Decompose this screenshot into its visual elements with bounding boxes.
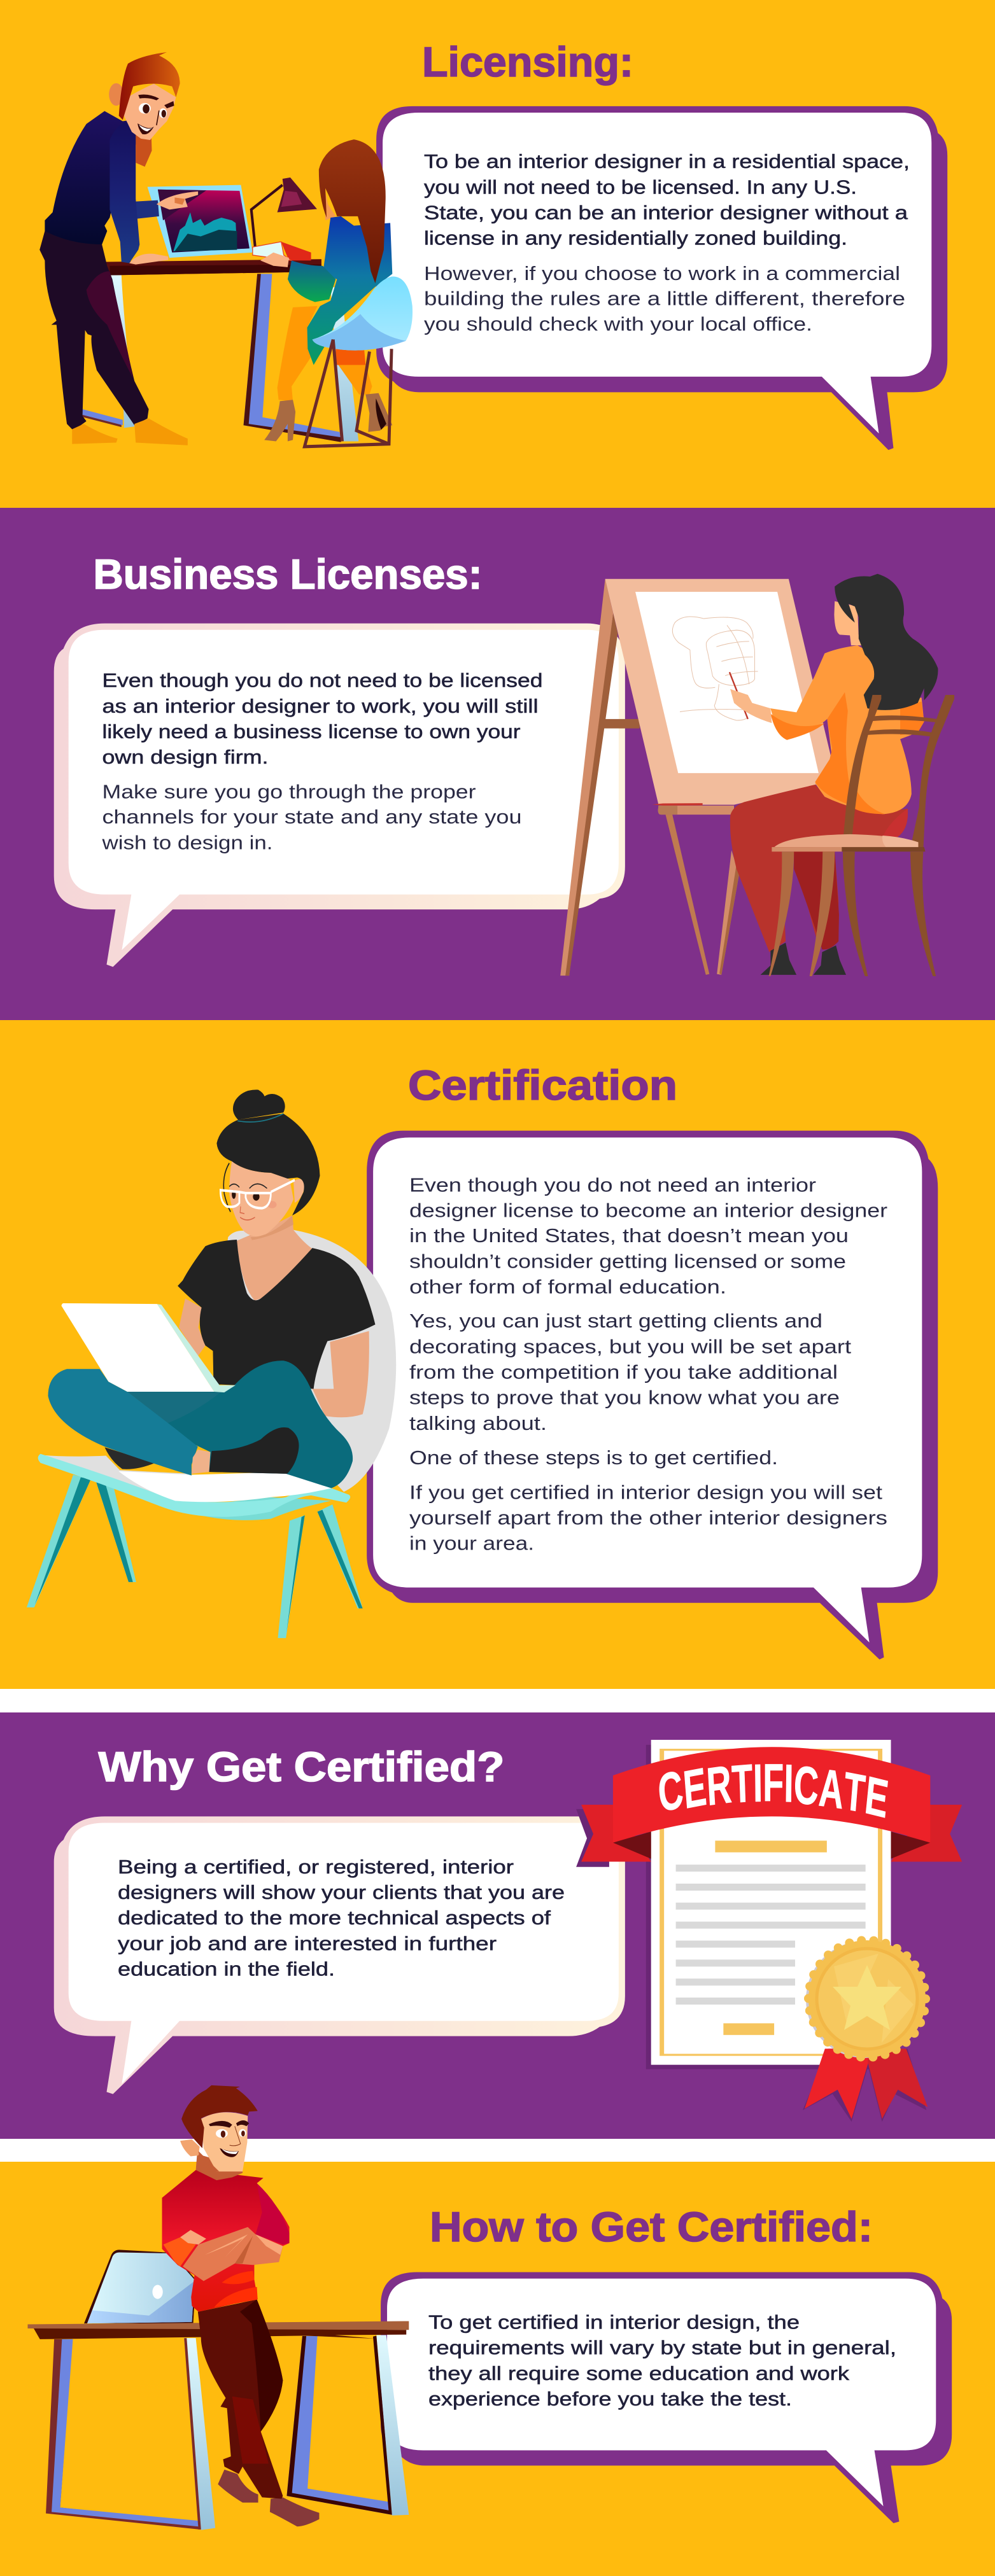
gold seal: [806, 1940, 926, 2058]
laptop: [84, 2250, 196, 2323]
text block: certification: Even though you do not need an interior: [409, 1173, 816, 1196]
woman: [178, 1089, 375, 1417]
text block: how to get certified: experience before you take the test.: [428, 2388, 792, 2410]
text block: certification: steps to prove that you know what you are: [409, 1387, 840, 1409]
text block: certification: talking about.: [409, 1412, 547, 1434]
text block: why get certified: [118, 1856, 565, 1980]
sketch on paper: [672, 617, 758, 720]
illustration: man and woman at desk: [39, 52, 413, 447]
text block: how to get certified: [428, 2311, 896, 2410]
text block: licensing: building the rules are a little different, therefore: [424, 288, 905, 310]
text block: licensing: [424, 150, 910, 335]
speech bubble: certification: [367, 1131, 938, 1660]
crossed legs: [48, 1361, 353, 1488]
text block: business licenses: likely need a business license to own your: [102, 720, 521, 743]
laptop: [61, 1303, 236, 1392]
ribbon banner: [576, 1747, 962, 1867]
man: [162, 2085, 319, 2526]
desk: [66, 259, 358, 442]
heading: certification: Certification: [408, 1061, 677, 1109]
illustration: woman with laptop on chair: [27, 1089, 396, 1638]
text block: why get certified: education in the field.: [118, 1957, 335, 1980]
heading: how to get certified: How to Get Certified:: [430, 2203, 873, 2250]
text block: business licenses: wish to design in.: [101, 832, 273, 854]
text block: licensing: However, if you choose to work in a commercial: [424, 262, 900, 284]
speech bubble: licensing: [376, 106, 947, 450]
woman on stool: [260, 139, 413, 447]
panel: business licenses: [0, 508, 995, 1020]
desk lamp and book: [251, 178, 317, 260]
text block: certification: decorating spaces, but you will be set apart: [409, 1335, 851, 1357]
text block: business licenses: as an interior designer to work, you will still: [102, 695, 539, 717]
heading: business licenses: Business Licenses:: [93, 550, 483, 598]
text block: certification: designer license to become an interior designer: [409, 1200, 887, 1222]
panel: certification: [0, 1020, 995, 1689]
text block: why get certified: Being a certified, or registered, interior: [118, 1856, 514, 1878]
text block: how to get certified: they all require some education and work: [428, 2362, 850, 2384]
text block: certification: One of these steps is to get certified.: [409, 1446, 778, 1469]
text block: certification: other form of formal education.: [409, 1276, 726, 1298]
text block: certification: in your area.: [409, 1532, 534, 1555]
chair: [769, 695, 954, 976]
speech bubble: how to get certified: [381, 2272, 952, 2523]
certificate paper: [646, 1740, 891, 2069]
text block: licensing: you should check with your local office.: [424, 312, 812, 335]
panel: licensing: [0, 0, 995, 508]
ribbon label: CERTIFICATE: [655, 1753, 891, 1829]
text block: business licenses: own design firm.: [102, 746, 269, 768]
text block: business licenses: Even though you do not need to be licensed: [102, 669, 543, 692]
text block: how to get certified: requirements will vary by state but in general,: [428, 2337, 896, 2359]
text block: why get certified: your job and are interested in further: [118, 1933, 497, 1955]
heading: licensing: Licensing:: [422, 38, 633, 85]
easel: [560, 579, 832, 976]
text block: licensing: license in any residentially zoned building.: [424, 227, 847, 249]
laptop: [148, 185, 253, 258]
divider band: white between certification and why: [0, 1689, 995, 1712]
text block: certification: Yes, you can just start getting clients and: [409, 1310, 822, 1332]
panel: how to get certified: [0, 2085, 995, 2576]
text block: certification: from the competition if you take additional: [409, 1361, 838, 1383]
illustration: man leaning on desk: [27, 2085, 409, 2530]
text block: licensing: State, you can be an interior designer without a: [424, 201, 908, 223]
illustration: woman painting at easel: [560, 574, 954, 976]
divider band: white between why and how: [0, 2139, 995, 2162]
text block: business licenses: Make sure you go through the proper: [102, 781, 476, 803]
text block: licensing: To be an interior designer in a residential space,: [424, 150, 910, 172]
desk top: [27, 2321, 409, 2339]
text block: certification: in the United States, that doesn’t mean you: [409, 1224, 849, 1247]
speech bubble: why get certified: [54, 1816, 625, 2094]
ribbon tails under seal: [803, 2048, 928, 2122]
text block: business licenses: channels for your state and any state you: [102, 806, 522, 828]
text block: how to get certified: To get certified in interior design, the: [428, 2311, 800, 2333]
text block: why get certified: dedicated to the more technical aspects of: [118, 1907, 551, 1929]
text block: certification: shouldn’t consider getting licensed or some: [409, 1250, 846, 1272]
chair back: [215, 1230, 396, 1492]
text block: certification: [409, 1173, 887, 1555]
text block: certification: yourself apart from the other interior designers: [409, 1507, 887, 1529]
illustration: certificate with ribbon and seal: [576, 1740, 962, 2122]
woman painter: [730, 574, 938, 975]
desk frames: [46, 2335, 409, 2530]
heading: why get certified: Why Get Certified?: [98, 1743, 504, 1790]
speech bubble: business licenses: [54, 624, 625, 967]
chair seat: [27, 1454, 363, 1638]
man standing: [39, 52, 198, 445]
panel: why get certified: [0, 1712, 995, 2139]
text block: licensing: you will not need to be licensed. In any U.S.: [424, 176, 857, 199]
text block: why get certified: designers will show your clients that you are: [118, 1881, 565, 1903]
text block: business licenses: [101, 669, 543, 854]
text block: certification: If you get certified in interior design you will set: [409, 1481, 882, 1503]
